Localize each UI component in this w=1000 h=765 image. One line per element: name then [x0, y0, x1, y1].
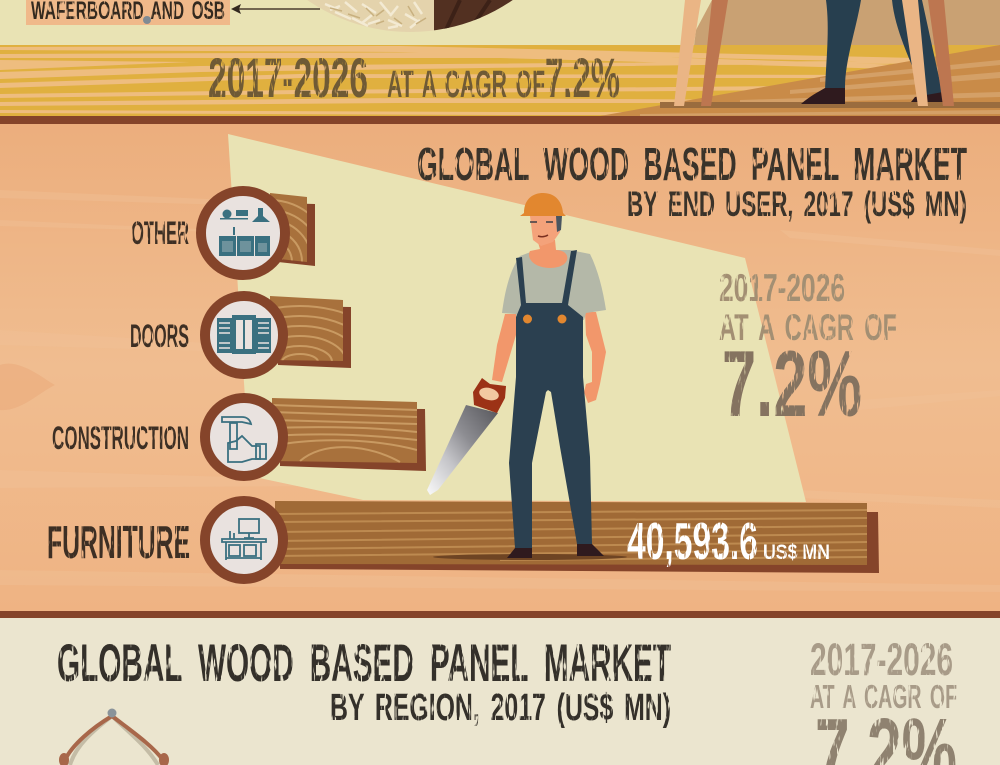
icon: window shutters	[205, 296, 283, 374]
worker: arms	[492, 312, 606, 403]
panel: product type section	[0, 0, 1000, 116]
bar: furniture	[275, 501, 879, 573]
text: CAGR strip: AT A CAGR OF	[387, 64, 545, 106]
worker: shirt	[502, 250, 606, 320]
worker: neck and head	[529, 216, 567, 268]
icon: desk and computer	[205, 501, 283, 579]
heading	[57, 634, 671, 729]
heading	[417, 138, 967, 224]
CAGR callout	[810, 634, 957, 765]
icon: hanging sign rope	[59, 708, 169, 765]
text: CAGR strip: 7.2%	[545, 46, 620, 109]
worker: buttons	[523, 314, 566, 324]
text: CAGR strip	[208, 46, 620, 109]
divider band	[0, 116, 1000, 124]
saw	[427, 378, 506, 495]
light beam background	[228, 134, 806, 502]
icon: hammer in hand	[205, 398, 283, 476]
CAGR callout: 2017-2026	[719, 267, 845, 310]
arrow	[231, 4, 320, 14]
divider band	[0, 611, 1000, 618]
value: 40,593.6 US$ MN: US$ MN	[763, 541, 830, 564]
row label: doors: DOORS	[130, 318, 189, 354]
CAGR callout: 7.2%	[722, 331, 862, 436]
image: wood panel circle	[308, 0, 513, 32]
CAGR callout: AT A CAGR OF	[719, 307, 897, 348]
bar: doors	[270, 296, 351, 368]
bar: construction	[272, 398, 426, 471]
illustration: worker with saw	[427, 193, 627, 560]
text: CAGR strip: 2017-2026	[208, 46, 368, 109]
worker: hard hat	[520, 193, 566, 216]
CAGR callout	[719, 267, 897, 436]
row label: other: OTHER	[131, 215, 189, 251]
row label: furniture: FURNITURE	[47, 516, 190, 568]
icon: kitchen	[201, 191, 285, 275]
panel: by end user	[0, 124, 1000, 611]
panel: wood plank strip	[0, 45, 1000, 116]
illustration: sawhorse and worker legs	[674, 0, 954, 106]
heading: BY REGION, 2017 (US$ MN)	[330, 687, 671, 729]
label: waferboard and OSB	[26, 0, 230, 25]
value: 40,593.6 US$ MN: 40,593.6	[627, 513, 758, 571]
worker: overalls	[509, 250, 592, 548]
bar: other	[270, 193, 315, 266]
worker: boots	[507, 544, 604, 558]
panel: by region	[0, 618, 1000, 765]
row label: construction: CONSTRUCTION	[52, 420, 189, 456]
